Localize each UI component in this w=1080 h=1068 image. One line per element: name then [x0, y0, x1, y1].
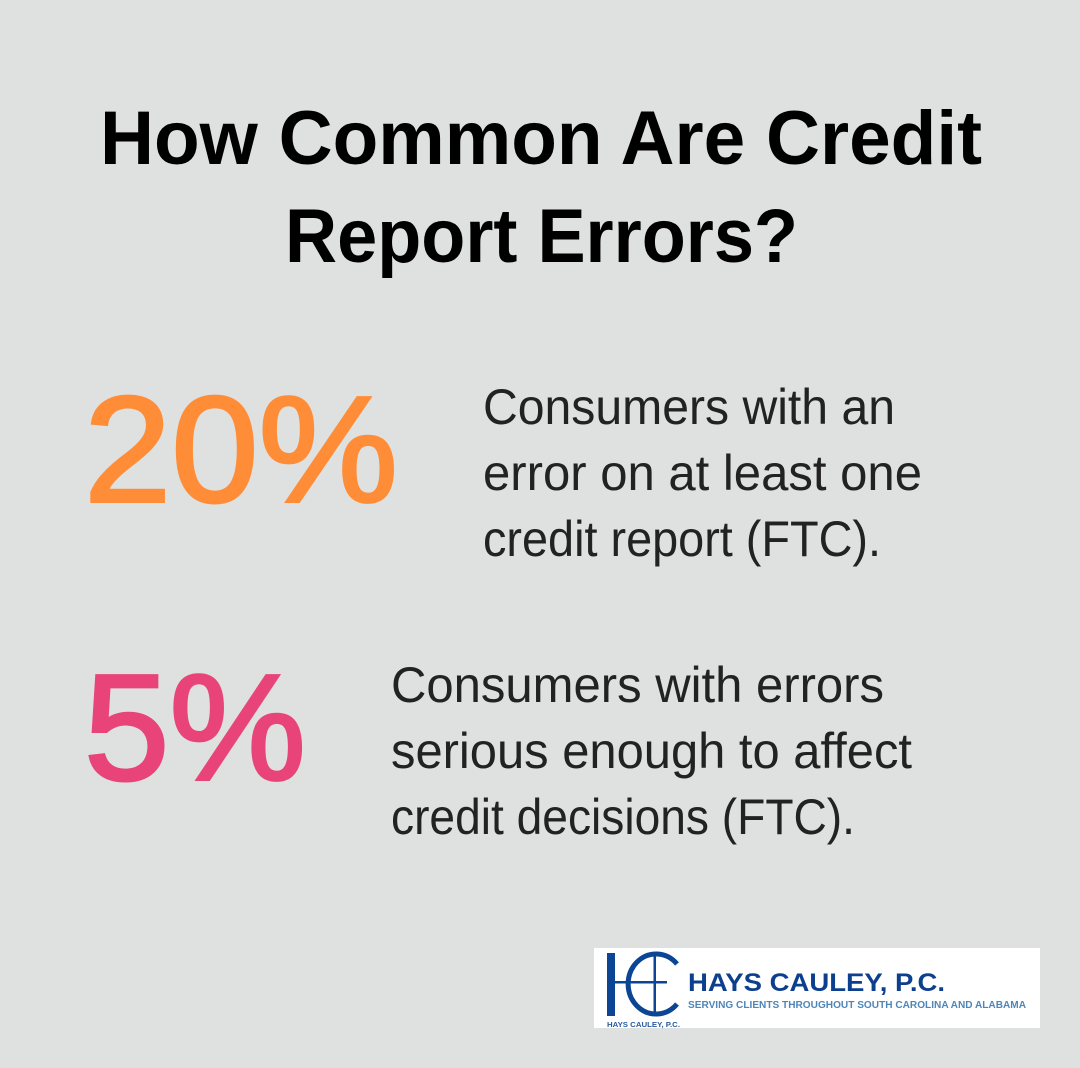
description: 20%: Consumers with an	[483, 379, 895, 435]
logo mark: HC monogram	[607, 953, 677, 1016]
description: 5%: credit decisions (FTC).	[391, 789, 855, 845]
description: 5%: Consumers with errors	[391, 657, 884, 713]
number: 5%: 5%	[84, 642, 306, 812]
title	[100, 96, 982, 279]
title: How Common Are Credit	[100, 96, 982, 181]
description: 20%	[483, 379, 922, 567]
stat: 5 percent	[84, 642, 912, 845]
title: Report Errors?	[285, 194, 798, 279]
description: 5%: serious enough to affect	[391, 723, 912, 779]
logo tagline: SERVING CLIENTS THROUGHOUT SOUTH CAROLINA AND ALABAMA	[688, 999, 1026, 1011]
number: 20%: 20%	[84, 364, 398, 534]
logo name: HAYS CAULEY, P.C.	[688, 969, 945, 997]
logo small caption: HAYS CAULEY, P.C.	[607, 1022, 680, 1029]
description: 20%: error on at least one	[483, 445, 922, 501]
logo: Hays Cauley, P.C.	[594, 948, 1040, 1029]
description: 20%: credit report (FTC).	[483, 511, 881, 567]
stat: 20 percent	[84, 364, 922, 567]
description: 5%	[391, 657, 912, 845]
